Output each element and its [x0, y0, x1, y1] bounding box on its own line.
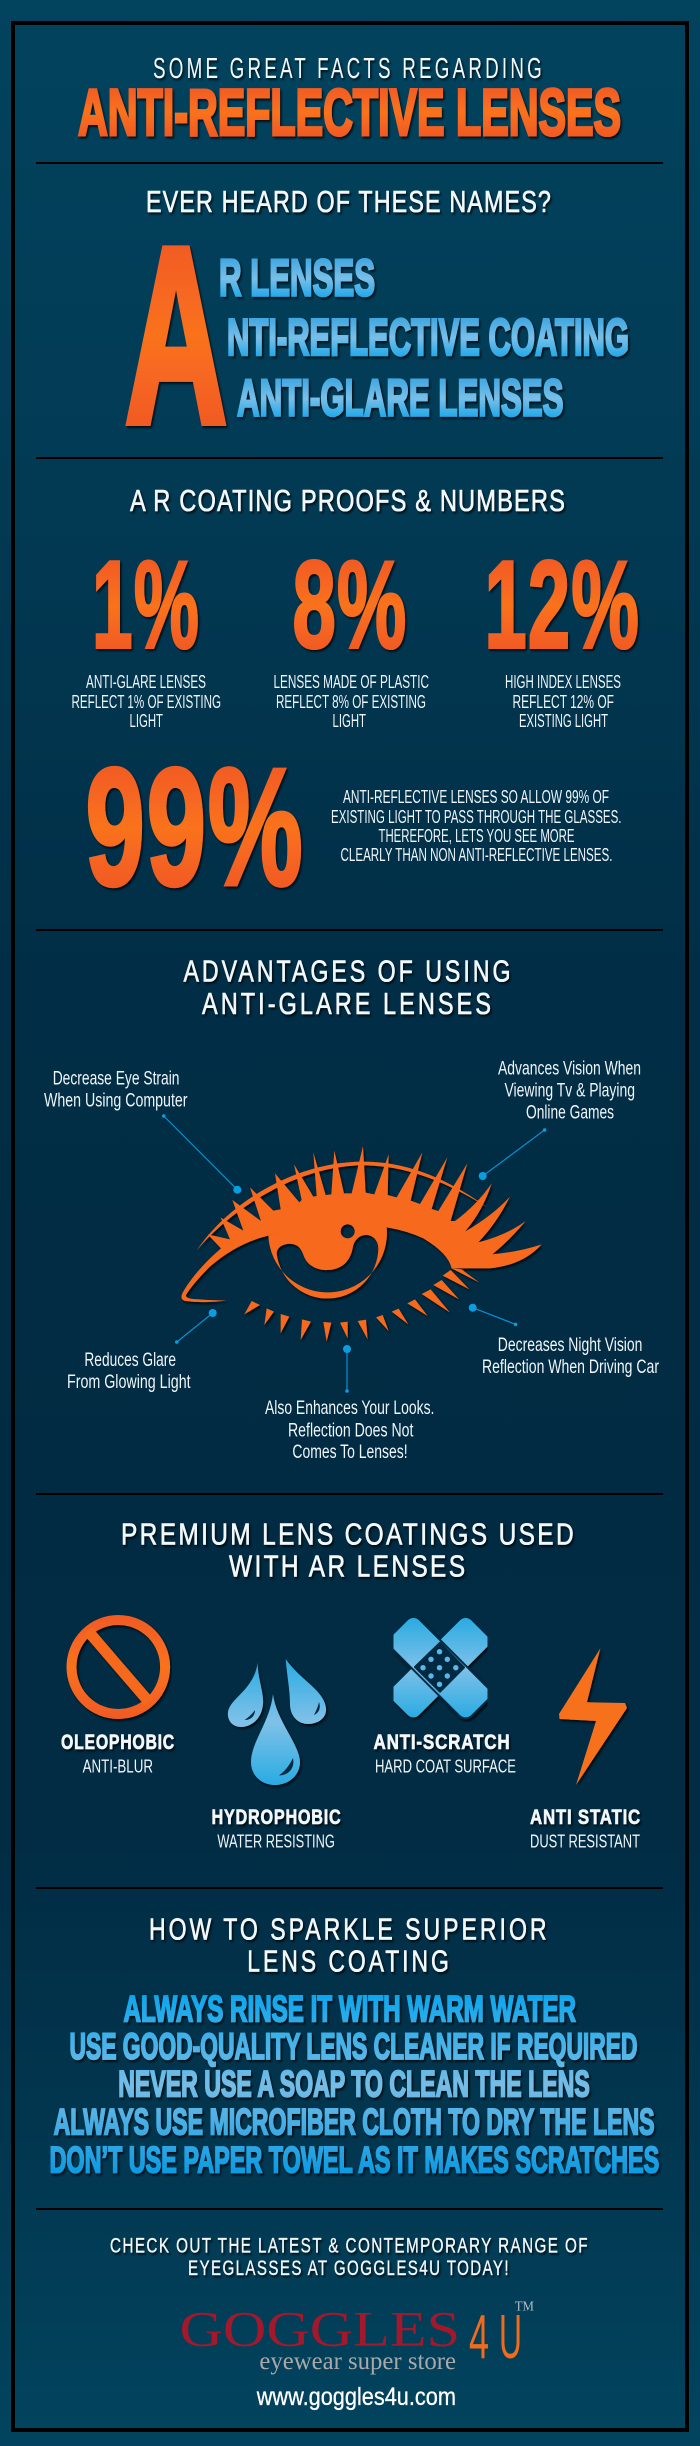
- stat: 8%: LIGHT: [332, 711, 366, 731]
- icon: eye with lashes: [181, 1146, 542, 1342]
- stat: 8%: LENSES MADE OF PLASTIC: [274, 672, 429, 692]
- callout: night vision: Decreases Night Vision: [498, 1334, 642, 1356]
- stat: 12%: EXISTING LIGHT: [519, 711, 608, 731]
- callout: looks: Reflection Does Not: [288, 1419, 414, 1441]
- stat: 12%: REFLECT 12% OF: [512, 692, 614, 712]
- oleophobic label: ANTI-BLUR: [83, 1757, 153, 1777]
- stat: 1%: [72, 536, 221, 731]
- callout: glare: From Glowing Light: [67, 1371, 191, 1393]
- panel: names: [125, 185, 629, 476]
- icon: lightning bolt: [559, 1648, 627, 1785]
- care heading: LENS COATING: [247, 1944, 452, 1979]
- website url: www.goggles4u.com: [256, 2383, 456, 2411]
- hydrophobic label: WATER RESISTING: [217, 1832, 335, 1852]
- 99% explanation: [331, 787, 622, 865]
- care tips list: [50, 1989, 659, 2180]
- anti-scratch label: HARD COAT SURFACE: [375, 1757, 516, 1777]
- callout: glare: Reduces Glare: [84, 1349, 176, 1371]
- logo: [180, 2299, 535, 2375]
- callout: glare: [67, 1309, 217, 1393]
- callout: eye strain: When Using Computer: [44, 1090, 188, 1112]
- callout: vision: Advances Vision When: [498, 1058, 641, 1080]
- advantages heading: ANTI-GLARE LENSES: [202, 986, 494, 1021]
- icon: water drops: [228, 1659, 326, 1785]
- name: AR lenses: R LENSES: [219, 250, 375, 308]
- 99% explanation: THEREFORE, LETS YOU SEE MORE: [378, 826, 574, 846]
- panel: premium coatings: [61, 1516, 641, 1852]
- call to action: EYEGLASSES AT GOGGLES4U TODAY!: [188, 2256, 510, 2280]
- callout: vision: Online Games: [526, 1102, 614, 1124]
- oleophobic label: [61, 1731, 175, 1777]
- coatings heading: WITH AR LENSES: [229, 1549, 467, 1584]
- callout: looks: [265, 1345, 434, 1463]
- stat: 1%: ANTI-GLARE LENSES: [86, 672, 206, 692]
- panel: advantages: [44, 954, 659, 1463]
- anti static label: DUST RESISTANT: [530, 1832, 640, 1852]
- coatings heading: [121, 1516, 576, 1584]
- anti static label: ANTI STATIC: [530, 1806, 641, 1829]
- callout: looks: Also Enhances Your Looks.: [265, 1397, 434, 1419]
- stat: 12%: [484, 536, 640, 731]
- anti static label: [530, 1806, 641, 1852]
- callout: eye strain: Decrease Eye Strain: [53, 1068, 180, 1090]
- stat: 8%: 8%: [292, 536, 408, 674]
- oleophobic label: OLEOPHOBIC: [61, 1731, 175, 1754]
- callout: looks: Comes To Lenses!: [292, 1441, 408, 1463]
- logo: GOGGLES: [180, 2301, 460, 2357]
- callout: vision: [479, 1058, 641, 1180]
- anti-scratch label: [374, 1731, 516, 1777]
- logo: eyewear super store: [259, 2348, 456, 2375]
- stat: 8%: REFLECT 8% OF EXISTING: [276, 692, 426, 712]
- icon: prohibition sign: [72, 1620, 165, 1714]
- care heading: HOW TO SPARKLE SUPERIOR: [149, 1912, 550, 1947]
- logo: 4: [469, 2303, 489, 2372]
- giant letter A: A: [125, 196, 227, 476]
- panel: footer: [110, 2234, 589, 2411]
- callout: vision: Viewing Tv & Playing: [504, 1080, 635, 1102]
- stat: 1%: 1%: [92, 536, 200, 674]
- stat: 99%: 99%: [86, 734, 304, 920]
- hydrophobic label: [212, 1806, 342, 1852]
- logo: TM: [515, 2299, 535, 2314]
- advantages heading: ADVANTAGES OF USING: [184, 954, 514, 988]
- proofs heading: A R COATING PROOFS & NUMBERS: [130, 483, 566, 518]
- coatings heading: PREMIUM LENS COATINGS USED: [121, 1516, 576, 1551]
- stat: 1%: REFLECT 1% OF EXISTING: [72, 692, 221, 712]
- logo: U: [499, 2303, 522, 2372]
- care heading: [149, 1912, 550, 1979]
- title: [78, 53, 621, 149]
- hydrophobic label: HYDROPHOBIC: [212, 1806, 342, 1829]
- stat: 1%: LIGHT: [130, 711, 163, 731]
- panel: proofs and numbers: [72, 483, 640, 920]
- names heading: EVER HEARD OF THESE NAMES?: [146, 185, 552, 219]
- anti-scratch label: ANTI-SCRATCH: [374, 1731, 510, 1754]
- advantages heading: [184, 954, 514, 1021]
- callout: eye strain: [44, 1068, 241, 1194]
- stat: 8%: [274, 536, 429, 731]
- call to action: [110, 2234, 589, 2280]
- callout: night vision: [469, 1304, 659, 1378]
- panel: care tips: [50, 1912, 659, 2180]
- icon: crossed bandage: [398, 1626, 481, 1709]
- stat: 12%: HIGH INDEX LENSES: [505, 672, 621, 692]
